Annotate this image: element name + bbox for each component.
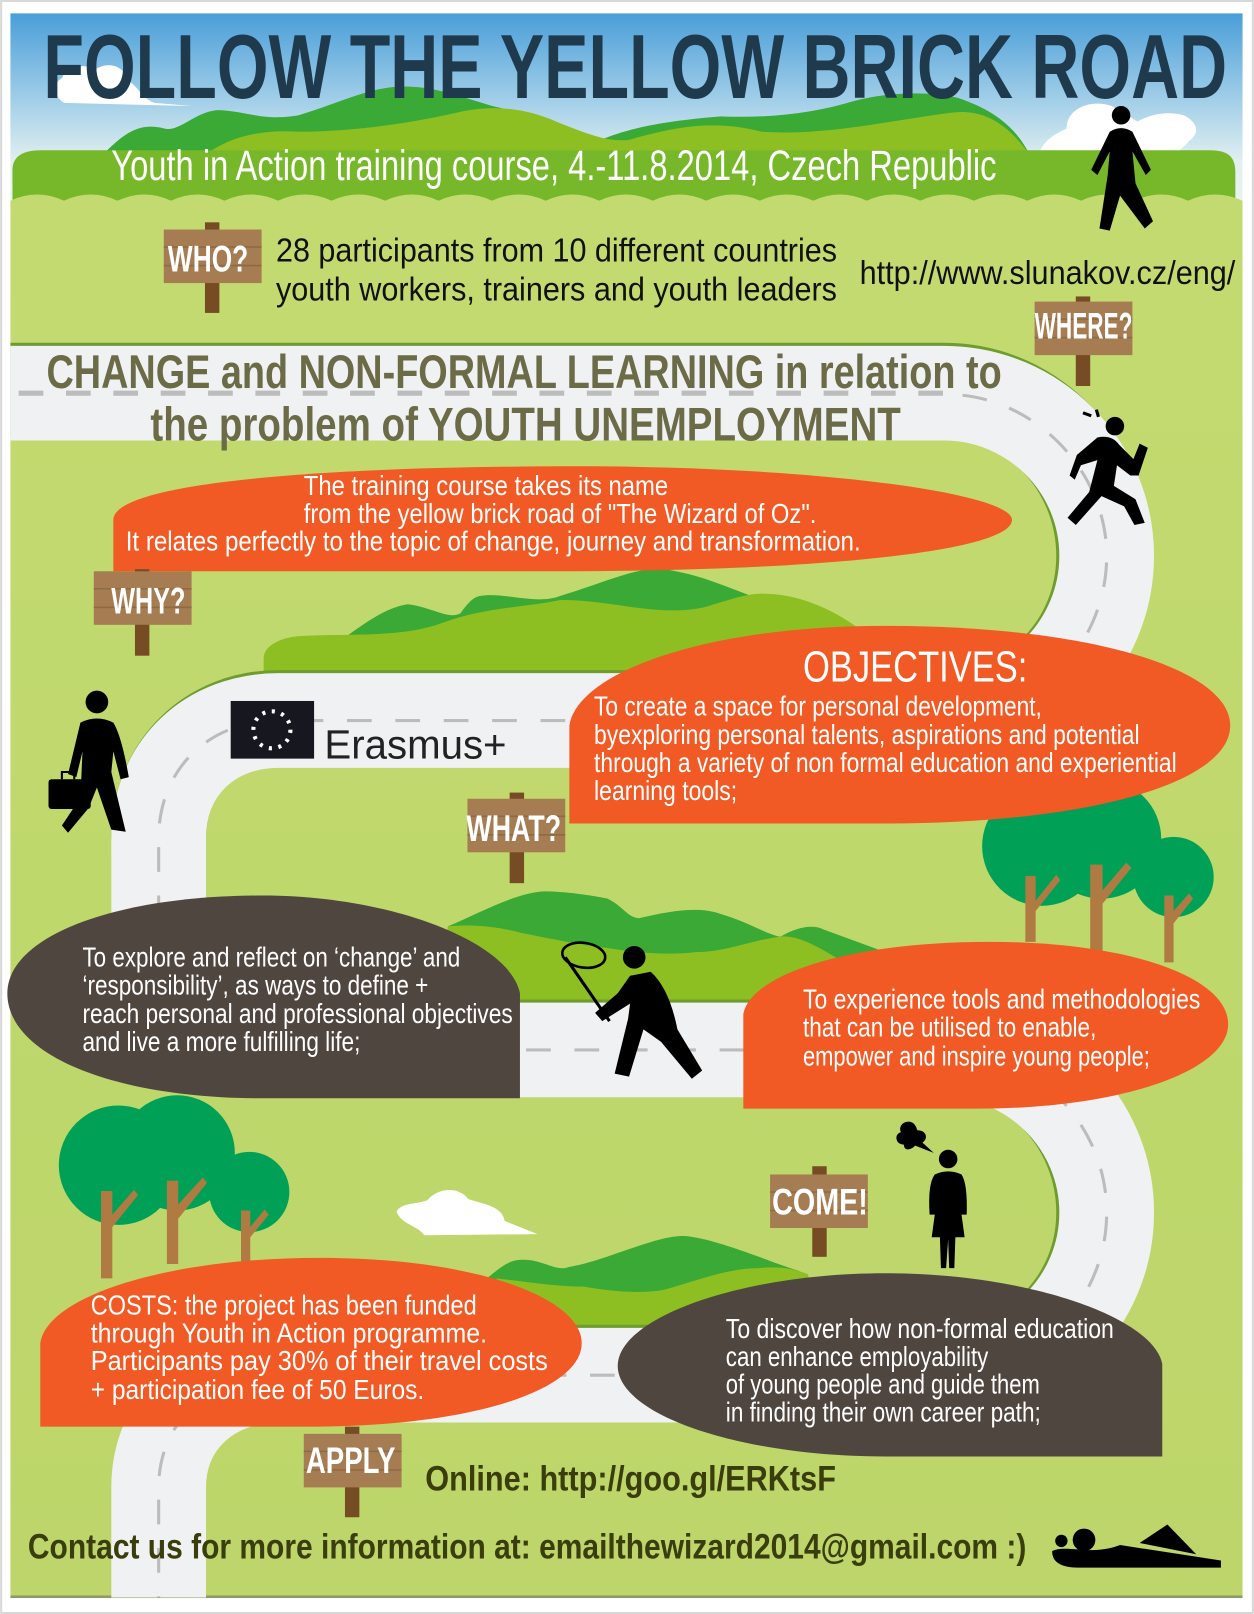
road [10, 390, 1107, 1598]
sign: come [770, 1166, 868, 1257]
callout: employability [618, 1273, 1162, 1457]
callout: employability: can enhance employability [726, 1341, 988, 1372]
icon: thinking woman [896, 1122, 967, 1268]
sign: why: WHY? [111, 579, 185, 621]
text: who [276, 231, 837, 308]
callout: objectives: To create a space for personal development, [594, 690, 1042, 721]
sign: come: COME! [772, 1181, 868, 1223]
subtitle: Youth in Action training course, 4.-11.8.2014, Czech Republic [111, 142, 997, 189]
callout: costs: COSTS: the project has been funded [91, 1289, 477, 1320]
icon: person with butterfly net [561, 940, 702, 1079]
callout: employability: of young people and guide them [726, 1369, 1040, 1400]
heading: CHANGE and NON-FORMAL LEARNING in relation to [46, 346, 1002, 399]
logo: Erasmus+: Erasmus+ [324, 722, 507, 768]
sign: where [1035, 296, 1132, 386]
callout: tools and methodologies: that can be utilised to enable, [803, 1012, 1096, 1043]
callout: objectives: learning tools; [594, 775, 737, 806]
cloud: top left [55, 65, 192, 106]
callout: costs: through Youth in Action programme. [91, 1317, 487, 1348]
callout: why text [113, 466, 1012, 571]
callout: costs: Participants pay 30% of their travel costs [91, 1345, 548, 1376]
hills: lower [488, 1236, 813, 1330]
website link: http://www.slunakov.cz/eng/ [860, 254, 1236, 291]
hills: top range [12, 86, 1235, 201]
sign: who [164, 222, 262, 313]
heading [46, 346, 1002, 452]
icon: businessman with briefcase [49, 691, 129, 833]
icon: person lying down [1052, 1524, 1221, 1568]
cloud: middle [396, 1190, 537, 1235]
sign: what [466, 793, 565, 883]
callout: why text: The training course takes its name [304, 470, 668, 501]
callout: change and responsibility: ‘responsibility’, as ways to define + [82, 969, 428, 1000]
icon: running person [1068, 410, 1148, 525]
callout: why text: from the yellow brick road of "The Wizard of Oz". [304, 498, 816, 529]
sign: why [94, 569, 192, 656]
hills: middle 2 [438, 891, 885, 1004]
sign: apply [304, 1427, 402, 1517]
sky background [10, 13, 1243, 201]
callout: employability: in finding their own career path; [726, 1397, 1041, 1428]
callout: change and responsibility [7, 896, 520, 1098]
callout: objectives: OBJECTIVES: [803, 643, 1027, 691]
callout: tools and methodologies [743, 942, 1228, 1109]
callout: objectives [569, 626, 1230, 823]
trees: right group [982, 779, 1214, 962]
callout: costs [40, 1258, 582, 1427]
callout: why text: It relates perfectly to the topic of change, journey and transformation. [126, 526, 861, 557]
sign: who: WHO? [168, 238, 248, 280]
contact line: Contact us for more information at: emailthewizard2014@gmail.com :) [28, 1527, 1026, 1566]
callout: change and responsibility: and live a more fulfilling life; [82, 1026, 360, 1057]
hills: middle 1 [264, 569, 875, 681]
callout: costs: + participation fee of 50 Euros. [91, 1374, 424, 1405]
logo: Erasmus+ [231, 701, 507, 768]
sign: apply: APPLY [306, 1439, 396, 1481]
trees: left group [59, 1095, 289, 1278]
callout: tools and methodologies: empower and inspire young people; [803, 1040, 1150, 1071]
sign: where: WHERE? [1035, 305, 1132, 347]
text: who: 28 participants from 10 different countries [276, 231, 837, 268]
cloud: top right [991, 104, 1196, 164]
text: who: youth workers, trainers and youth leaders [276, 271, 837, 308]
sign: what: WHAT? [466, 807, 561, 849]
heading: the problem of YOUTH UNEMPLOYMENT [150, 399, 901, 452]
callout: employability: To discover how non-formal education [726, 1313, 1114, 1344]
callout: change and responsibility: reach personal and professional objectives [82, 998, 513, 1029]
icon: walking person [1091, 106, 1153, 231]
callout: change and responsibility: To explore and reflect on ‘change’ and [82, 942, 460, 973]
callout: objectives: byexploring personal talents, aspirations and potential [594, 719, 1140, 750]
apply link: Online: http://goo.gl/ERKtsF [425, 1459, 836, 1498]
